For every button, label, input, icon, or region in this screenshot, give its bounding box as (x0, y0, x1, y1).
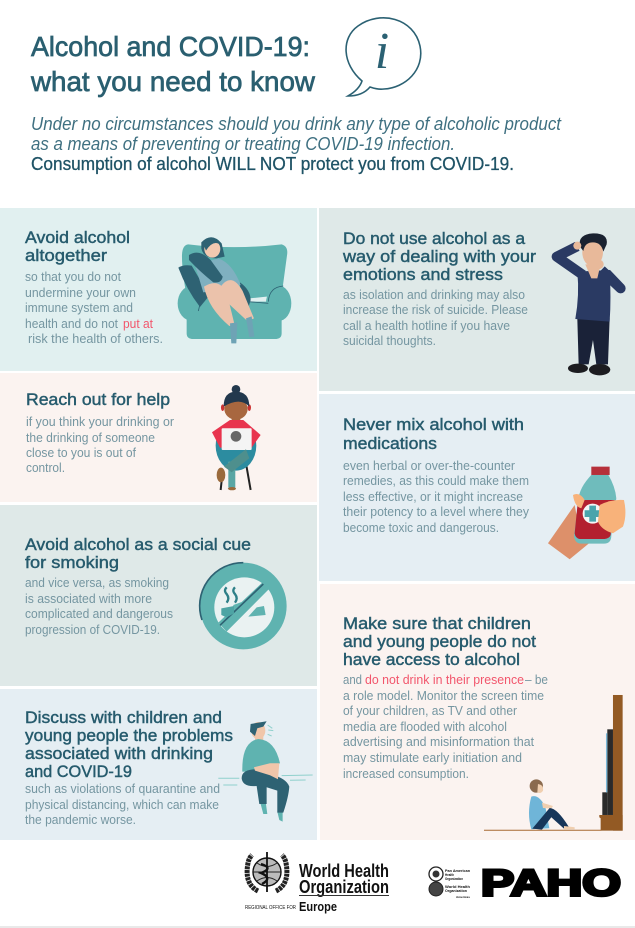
body text: a role model. Monitor the screen time (343, 689, 544, 703)
heading: altogether (25, 246, 107, 265)
logo: WHO Europe: World Health (299, 861, 389, 881)
heading: have access to alcohol (343, 650, 520, 669)
heading (343, 415, 524, 453)
heading: medications (343, 434, 437, 453)
illustration: woman on sofa (178, 237, 291, 343)
heading: Never mix alcohol with (343, 415, 524, 434)
heading (25, 535, 251, 572)
logo: PAHO (429, 862, 621, 904)
heading (25, 228, 130, 265)
body text: such as violations of quarantine and (25, 782, 220, 796)
illustration: seated man (218, 721, 313, 822)
body text: even herbal or over-the-counter (343, 459, 515, 473)
body text: control. (26, 461, 65, 475)
illustration: woman with laptop (212, 385, 261, 490)
heading: Avoid alcohol (25, 228, 130, 247)
body text: call a health hotline if you have (343, 319, 510, 333)
illustration: hand holding bottle (548, 467, 625, 559)
body text: physical distancing, which can make (25, 798, 219, 812)
body text (343, 459, 530, 535)
body text: immune system and (25, 301, 133, 315)
heading: Reach out for help (26, 390, 170, 409)
body text: the pandemic worse. (25, 813, 136, 827)
body text: and vice versa, as smoking (25, 576, 169, 590)
body text (343, 673, 548, 781)
intro text: Under no circumstances should you drink any type of alcoholic product (31, 114, 562, 134)
body text: and (343, 673, 362, 687)
PAHO small emblems: Health (445, 872, 454, 877)
heading: Make sure that children (343, 614, 531, 633)
body text: remedies, as this could make them (343, 474, 529, 488)
body text (25, 270, 163, 346)
body text: less effective, or it might increase (343, 490, 523, 504)
illustration: stressed man (557, 233, 621, 375)
header (30, 18, 562, 174)
heading: young people the problems (25, 726, 233, 745)
panel: reach out for help (0, 373, 317, 502)
PAHO small emblems (429, 867, 471, 899)
logo: WHO Europe: Europe (299, 899, 337, 914)
body text: become toxic and dangerous. (343, 521, 499, 535)
logo: WHO Europe: Organization (299, 877, 389, 897)
illustration: child watching TV (484, 695, 623, 831)
intro text: Consumption of alcohol WILL NOT protect you from COVID-19. (31, 154, 514, 174)
logo: PAHO: PAHO (481, 862, 621, 904)
PAHO small emblems: Americas (456, 895, 470, 899)
logo: WHO Europe: REGIONAL OFFICE FOR (245, 905, 296, 911)
body text: close to you is out of (26, 446, 137, 460)
body text: if you think your drinking or (26, 415, 174, 429)
icon: no smoking (200, 563, 287, 649)
panel: discuss with children (0, 689, 317, 840)
body text: increase the risk of suicide. Please (343, 303, 528, 317)
heading (342, 229, 536, 284)
body text (343, 288, 528, 348)
intro text: as a means of preventing or treating COVID-19 infection. (31, 134, 455, 154)
body text (25, 576, 173, 637)
body text: their potency to a level where they (343, 505, 530, 519)
body text: complicated and dangerous (25, 607, 173, 621)
heading: way of dealing with your (342, 247, 536, 266)
panel: never mix with medications (319, 394, 635, 581)
body text: advertising and misinformation that (343, 735, 535, 749)
heading: Discuss with children and (25, 708, 222, 727)
panel: avoid alcohol altogether (0, 208, 317, 371)
body text: – be (525, 673, 548, 687)
heading: and young people do not (343, 632, 536, 651)
body text: put at (123, 317, 153, 331)
body text: increased consumption. (343, 767, 469, 781)
body text: suicidal thoughts. (343, 334, 436, 348)
icon: speech bubble with i: i (375, 23, 389, 80)
PAHO small emblems: World Health (445, 884, 471, 889)
icon: speech bubble with i (346, 18, 421, 96)
panel: social cue for smoking (0, 505, 317, 686)
body text: of your children, as TV and other (343, 704, 517, 718)
body text: risk the health of others. (28, 332, 163, 346)
title: what you need to know (30, 66, 315, 97)
body text: undermine your own (25, 286, 136, 300)
heading (343, 614, 536, 669)
body text: do not drink in their presence (365, 673, 524, 687)
body text: as isolation and drinking may also (343, 288, 525, 302)
heading: for smoking (25, 553, 119, 572)
body text: health and do not (25, 317, 118, 331)
body text: is associated with more (25, 592, 152, 606)
intro text (31, 114, 562, 174)
PAHO small emblems: Organization (445, 876, 463, 881)
panel: do not use alcohol for stress (319, 208, 635, 391)
panel: children and young people (320, 584, 635, 840)
heading: and COVID-19 (25, 762, 132, 781)
heading: associated with drinking (25, 744, 213, 763)
heading (25, 708, 233, 781)
body text: media are flooded with alcohol (343, 720, 507, 734)
title: Alcohol and COVID-19: (31, 31, 310, 62)
body text: progression of COVID-19. (25, 623, 160, 637)
body text: may stimulate early initiation and (343, 751, 522, 765)
body text (26, 415, 174, 475)
logo: WHO Europe (245, 852, 389, 914)
WHO emblem (247, 852, 287, 892)
PAHO small emblems: Organization (445, 888, 467, 893)
PAHO small emblems: Pan American (445, 868, 471, 873)
heading: Avoid alcohol as a social cue (25, 535, 251, 554)
title (30, 31, 315, 97)
body text (25, 782, 220, 827)
body text: the drinking of someone (26, 431, 155, 445)
body text: so that you do not (25, 270, 121, 284)
heading: emotions and stress (343, 265, 503, 284)
heading: Do not use alcohol as a (343, 229, 526, 248)
